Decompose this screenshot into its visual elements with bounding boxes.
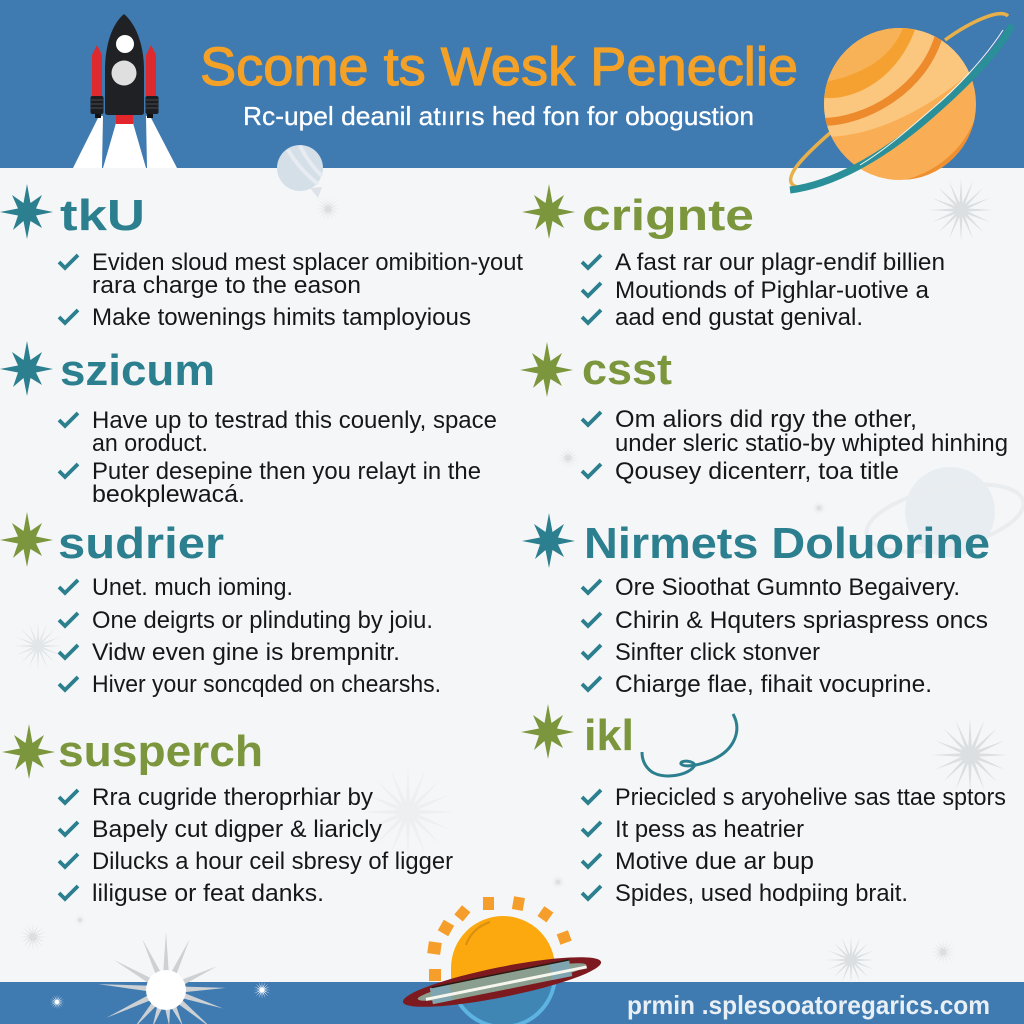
section: tkU bbox=[0, 184, 523, 331]
subtitle: Rc-upel deanil atıırıs hed fon for obogustion bbox=[243, 101, 754, 131]
bullet: Make towenings himits tamployious bbox=[92, 304, 471, 331]
bullet: Chiarge flae, fihait vocuprine. bbox=[615, 671, 932, 698]
icon: rocket bbox=[73, 14, 177, 168]
bullet: liliguse or feat danks. bbox=[92, 880, 324, 907]
section: ikl bbox=[521, 704, 1006, 907]
heading: sudrier bbox=[58, 519, 224, 568]
bullet: Hiver your soncqded on chearshs. bbox=[92, 671, 441, 698]
bullet: Rra cugride theroprhiar by bbox=[92, 784, 373, 811]
bullet: Moutionds of Pighlar-uotive a bbox=[615, 277, 930, 304]
bullet: One deigrts or plinduting by joiu. bbox=[92, 607, 433, 634]
bullet: A fast rar our plagr-endif billien bbox=[615, 249, 945, 276]
bullet: Eviden sloud mest splacer omibition-yout bbox=[92, 249, 523, 276]
bullet: Dilucks a hour ceil sbresy of ligger bbox=[92, 848, 453, 875]
bullet bbox=[59, 407, 497, 457]
bullet: Vidw even gine is brempnitr. bbox=[92, 639, 400, 666]
heading: tkU bbox=[60, 191, 145, 240]
heading: crignte bbox=[582, 191, 754, 240]
icon: white star sun bbox=[98, 932, 226, 1024]
bullet: Have up to testrad this couenly, space bbox=[92, 407, 497, 434]
bullet: Priecicled s aryohelive sas ttae sptors bbox=[615, 784, 1006, 811]
bullet: Spides, used hodpiing brait. bbox=[615, 880, 908, 907]
bullet: rara charge to the eason bbox=[92, 272, 361, 299]
section: crignte bbox=[522, 184, 945, 331]
curl swoosh bbox=[642, 714, 737, 776]
section: susperch bbox=[2, 724, 453, 907]
icon: small sparkle bbox=[253, 981, 271, 999]
icon: small pale balloon planet bbox=[277, 145, 323, 198]
icon: small sparkle bbox=[50, 994, 64, 1010]
star icon bbox=[0, 512, 53, 567]
bullet: Chirin & Hquters spriaspress oncs bbox=[615, 607, 988, 634]
bullet: Qousey dicenterr, toa title bbox=[615, 458, 899, 485]
header band bbox=[0, 0, 1024, 168]
background decorations bbox=[14, 178, 1024, 984]
bullet bbox=[59, 249, 523, 299]
bullet: Motive due ar bup bbox=[615, 848, 814, 875]
star icon bbox=[521, 704, 574, 759]
star icon bbox=[520, 342, 573, 397]
heading: csst bbox=[582, 345, 672, 394]
section: csst bbox=[520, 342, 1008, 485]
bullet: It pess as heatrier bbox=[615, 816, 804, 843]
heading: susperch bbox=[58, 727, 263, 776]
bullet: Ore Sioothat Gumnto Begaivery. bbox=[615, 574, 960, 601]
bullet: Bapely cut digper & liaricly bbox=[92, 816, 382, 843]
bullet: an oroduct. bbox=[92, 430, 208, 457]
section: sudrier bbox=[0, 512, 441, 698]
star icon bbox=[0, 184, 53, 239]
bullet bbox=[59, 458, 481, 508]
footer url: prmin .splesooatoregarics.com bbox=[627, 990, 990, 1020]
section: szicum bbox=[0, 341, 497, 508]
heading: szicum bbox=[60, 346, 215, 395]
heading: ikl bbox=[584, 711, 634, 760]
heading: Nirmets Doluorine bbox=[584, 519, 990, 568]
bullet: aad end gustat genival. bbox=[615, 304, 863, 331]
star icon bbox=[0, 341, 53, 396]
icon: bottom sun planet bbox=[400, 896, 604, 1024]
bullet: Om aliors did rgy the other, bbox=[615, 406, 917, 433]
section: Nirmets Doluorine bbox=[522, 513, 990, 698]
star icon bbox=[2, 724, 55, 779]
footer band bbox=[0, 982, 1024, 1024]
bullet bbox=[582, 406, 1008, 457]
star icon bbox=[522, 184, 575, 239]
bullet: Sinfter click stonver bbox=[615, 639, 820, 666]
bullet: Puter desepine then you relayt in the bbox=[92, 458, 481, 485]
title: Scome ts Wesk Peneclie bbox=[200, 37, 798, 97]
bullet: beokplewacá. bbox=[92, 481, 245, 508]
bullet: under sleric statio-by whipted hinhing bbox=[615, 430, 1008, 457]
star icon bbox=[522, 513, 575, 568]
icon: ringed planet bbox=[790, 10, 1012, 190]
bullet: Unet. much ioming. bbox=[92, 574, 293, 601]
